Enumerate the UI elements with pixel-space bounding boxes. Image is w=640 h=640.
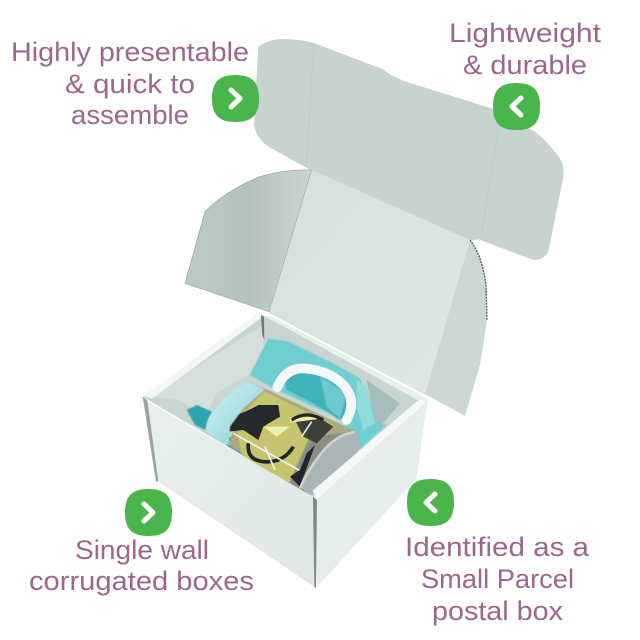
mug print: yellow ground <box>235 392 333 487</box>
lid: top flap <box>254 39 564 260</box>
back lid panel <box>269 170 470 395</box>
mug print: grey rim band <box>288 432 357 495</box>
inner wall shadow <box>367 380 400 425</box>
callout: lightweight and durable <box>449 18 602 80</box>
callout: small parcel postal box: Identified as a <box>405 532 590 562</box>
icon: green right chevron badge <box>212 75 259 122</box>
callout: small parcel postal box <box>405 532 590 626</box>
box right rim <box>313 399 427 500</box>
tissue paper <box>187 338 387 455</box>
callout: highly presentable <box>11 37 249 130</box>
mug right end <box>300 431 360 496</box>
box corrugated edges <box>143 315 317 588</box>
callout: single wall corrugated boxes: corrugated boxes <box>29 566 254 596</box>
mug handle <box>277 368 351 420</box>
open postal box with mug <box>143 39 564 588</box>
box right face <box>317 401 427 587</box>
icon: green left chevron badge, lower <box>407 479 454 526</box>
icon: green left chevron badge <box>493 83 540 130</box>
callout: lightweight and durable: Lightweight <box>449 18 602 48</box>
callout: small parcel postal box: Small Parcel <box>421 564 574 594</box>
box front face <box>147 402 315 587</box>
callout: small parcel postal box: postal box <box>432 596 564 626</box>
right side flap <box>423 240 487 416</box>
callout: single wall corrugated boxes: Single wall <box>75 535 209 565</box>
mug print: cyclist silhouettes <box>225 405 280 440</box>
callout: highly presentable: Highly presentable <box>11 37 249 67</box>
inner left wall <box>150 325 264 412</box>
mug body <box>207 382 360 496</box>
left side flap <box>185 170 312 312</box>
box interior base <box>143 315 427 497</box>
box left rim <box>143 313 262 399</box>
inner back wall <box>265 325 403 425</box>
mug left end <box>207 382 265 445</box>
callout: single wall corrugated boxes <box>29 535 254 596</box>
callout: lightweight and durable: & durable <box>463 50 587 80</box>
callout: highly presentable: & quick to <box>65 69 195 99</box>
icon: green right chevron badge, lower <box>125 489 172 536</box>
callout: highly presentable: assemble <box>71 100 189 130</box>
box back rim <box>265 316 427 401</box>
